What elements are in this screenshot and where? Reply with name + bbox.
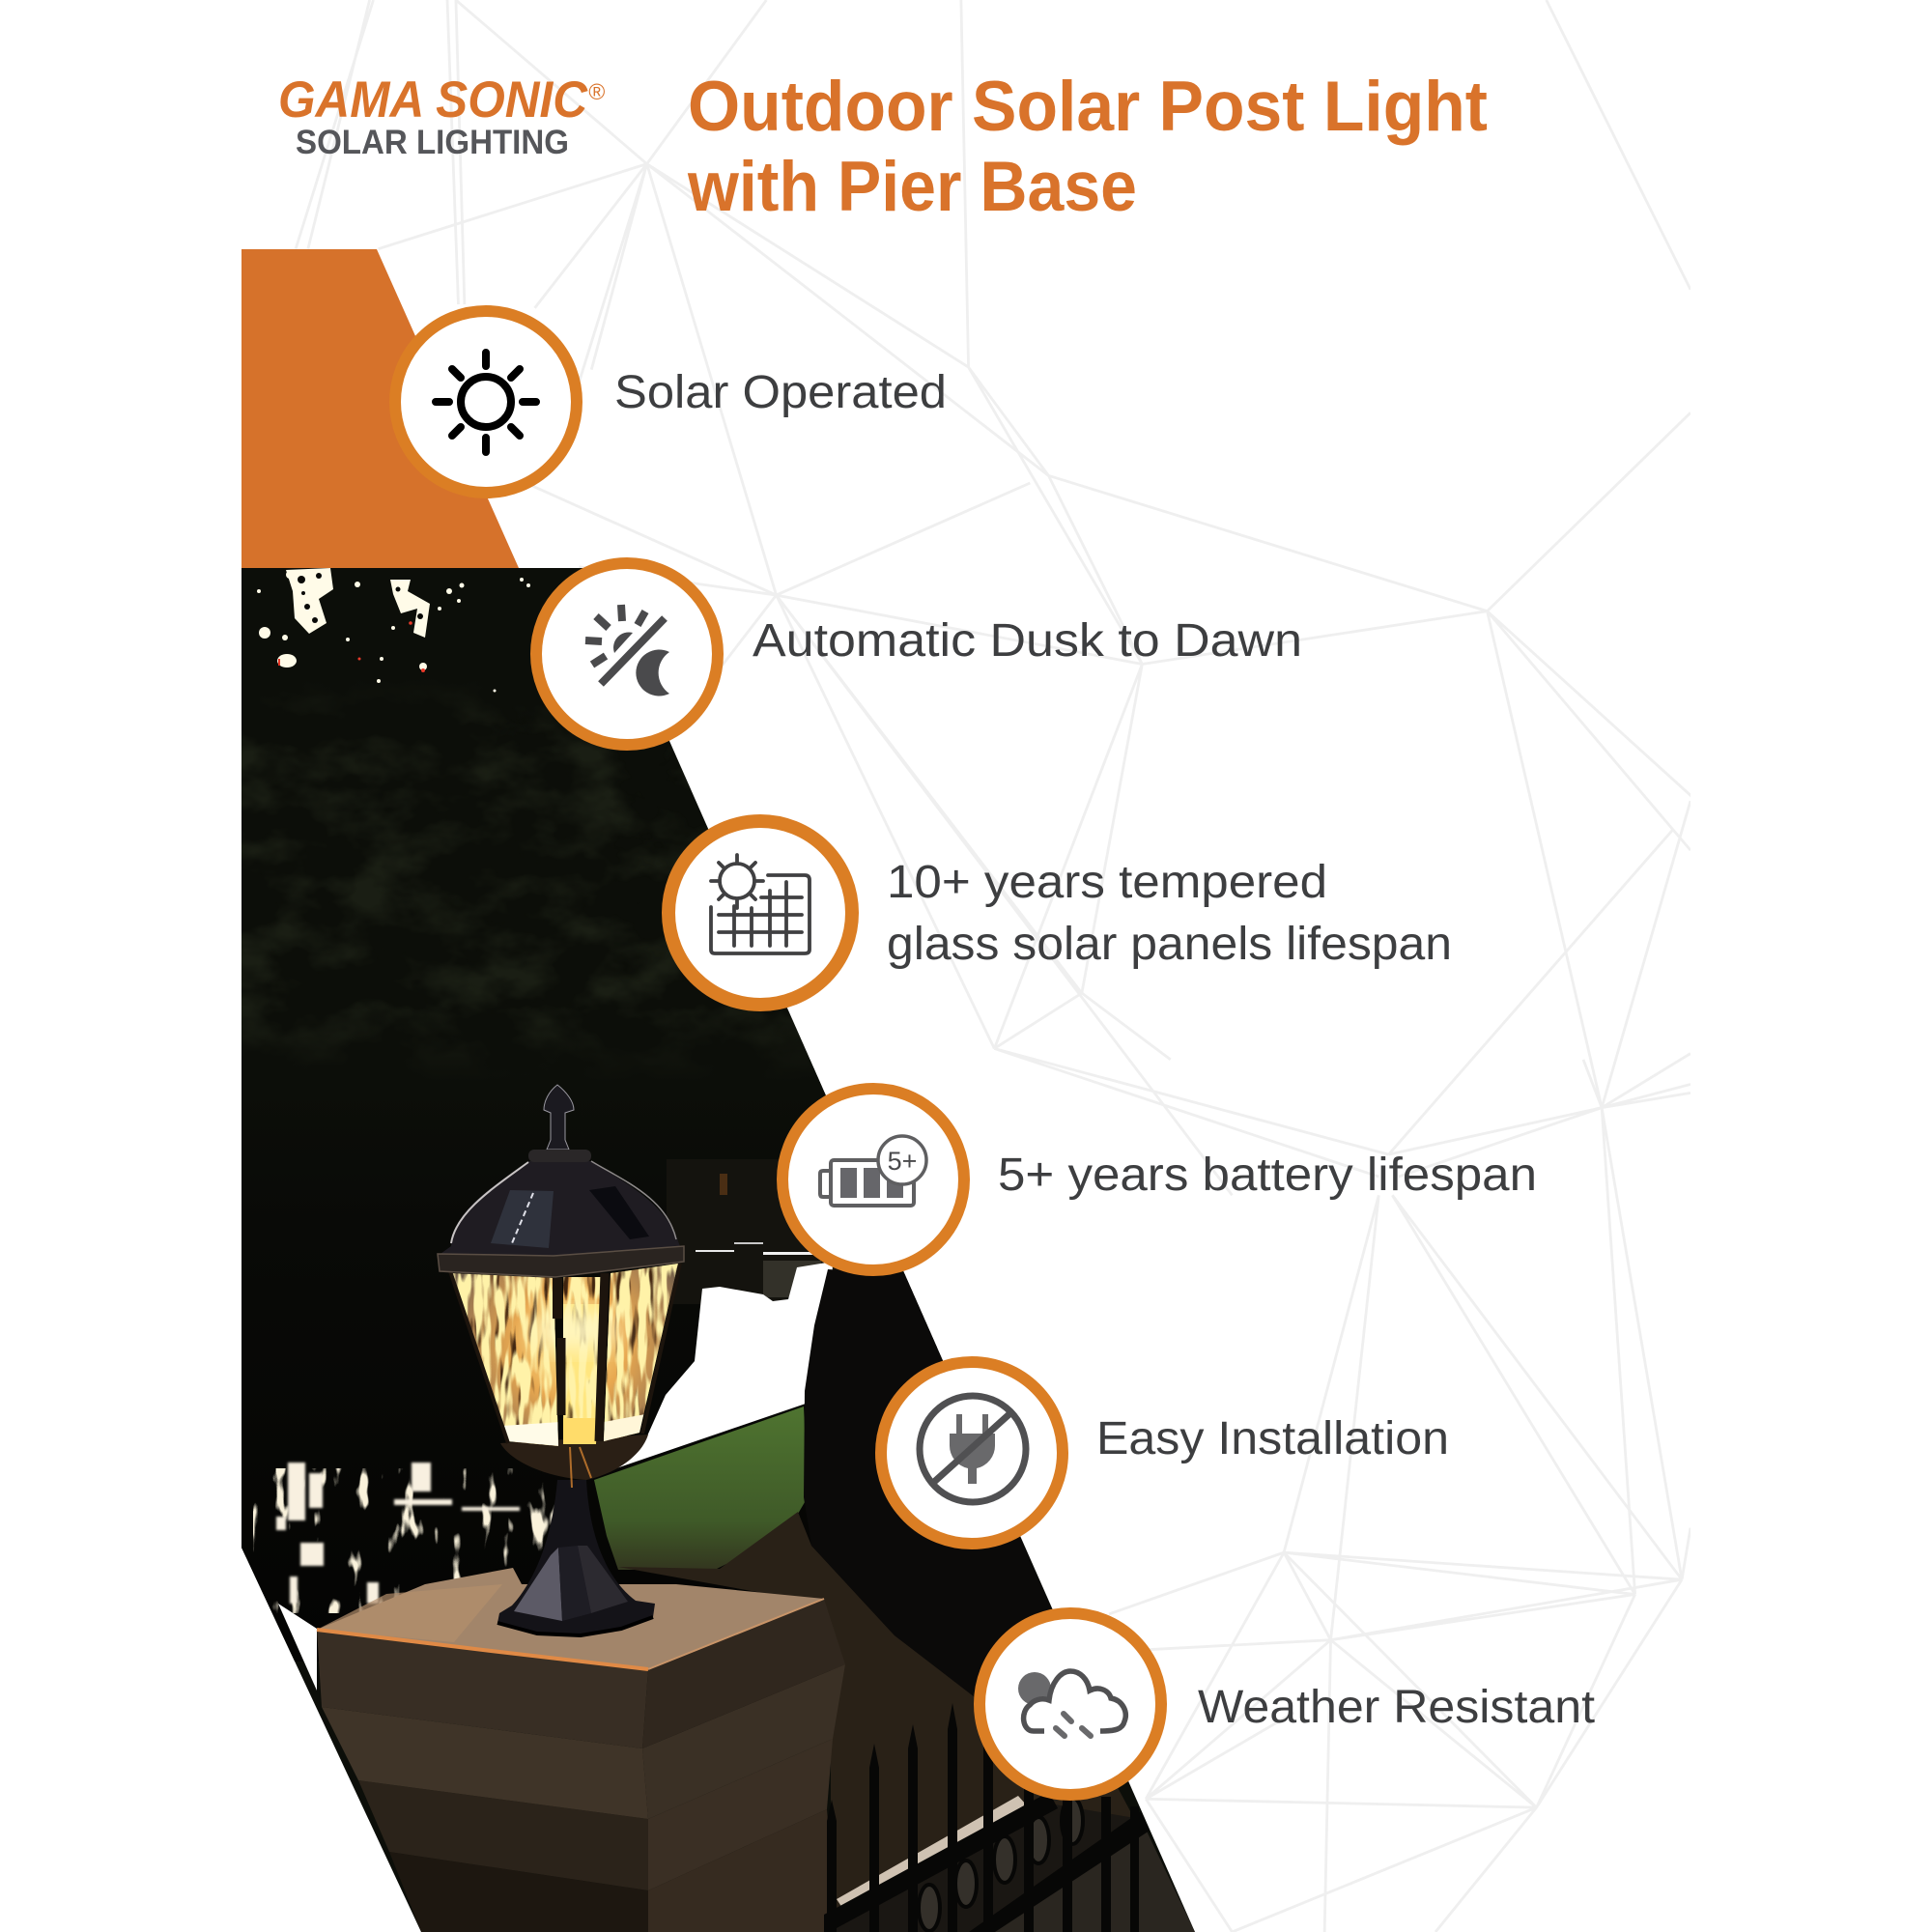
- lamp finial: [528, 1085, 591, 1162]
- pier upper block: [317, 1630, 648, 1748]
- feature: automatic dusk to dawn: [536, 563, 1302, 745]
- white sliver lower left: [278, 1604, 317, 1690]
- dark hedge and fence: [804, 1269, 974, 1696]
- label: weather resistant: Weather Resistant: [1198, 1682, 1595, 1733]
- logo: brand name: GAMA SONIC: [278, 71, 588, 128]
- feature: weather resistant: [980, 1613, 1595, 1795]
- lamp base and stem: [497, 1480, 655, 1635]
- icon: sun: [395, 311, 577, 493]
- lamp glass: [452, 1264, 678, 1446]
- label: solar operated: Solar Operated: [614, 367, 947, 418]
- label: solar panel lifespan: glass solar panels lifespan: [887, 919, 1452, 970]
- pier middle block: [322, 1707, 648, 1819]
- pier lower block: [389, 1852, 648, 1932]
- title: [687, 68, 1488, 226]
- bright sky reflection on water: [616, 1262, 833, 1468]
- label: easy installation: Easy Installation: [1096, 1413, 1449, 1464]
- lamp band: [438, 1246, 684, 1277]
- logo: [278, 71, 605, 161]
- icon: battery with 5+ badge: [782, 1089, 964, 1270]
- far bank reflection: [667, 1159, 840, 1304]
- icon: cloud and rain: [980, 1613, 1161, 1795]
- logo: subtitle: SOLAR LIGHTING: [296, 124, 569, 161]
- dark water: [242, 1082, 937, 1662]
- feature: easy installation: [881, 1362, 1449, 1544]
- bright sky specks through the trees: [257, 568, 530, 692]
- iron fence: [824, 1703, 1195, 1932]
- title: with Pier Base: [687, 148, 1137, 226]
- stone pier: [317, 1568, 845, 1932]
- icon: sun and moon: [536, 563, 718, 745]
- lamp roof with solar panels: [438, 1161, 684, 1256]
- logo: registered mark: ®: [588, 79, 605, 104]
- pier top face: [317, 1568, 824, 1669]
- water reflection highlights: [253, 1468, 572, 1613]
- label: solar panel lifespan: 10+ years tempered: [887, 857, 1327, 908]
- feature: battery lifespan: [782, 1089, 1537, 1270]
- label: solar panel lifespan: [887, 857, 1452, 970]
- icon: crossed plug: [881, 1362, 1063, 1544]
- grass lawn: [594, 1406, 808, 1570]
- lamp saucer: [500, 1435, 648, 1480]
- icon: battery with 5+ badge: 5+: [888, 1147, 917, 1176]
- dark trees background: [242, 568, 1208, 1932]
- feature: solar operated: [395, 311, 947, 493]
- photo: lit solar post lamp on stone pier: [242, 568, 1208, 1932]
- title: Outdoor Solar Post Light: [688, 68, 1488, 146]
- background geometric line pattern: [296, 0, 1696, 1932]
- lamp mullions: [450, 1264, 680, 1443]
- orange background panel: [242, 249, 519, 568]
- label: automatic dusk to dawn: Automatic Dusk to Dawn: [753, 615, 1302, 667]
- ground: [618, 1512, 1195, 1932]
- lamp: [438, 1085, 686, 1635]
- feature: solar panel lifespan: [668, 821, 1452, 1005]
- label: battery lifespan: 5+ years battery lifespan: [998, 1150, 1537, 1201]
- icon: sun and solar panel: [668, 821, 852, 1005]
